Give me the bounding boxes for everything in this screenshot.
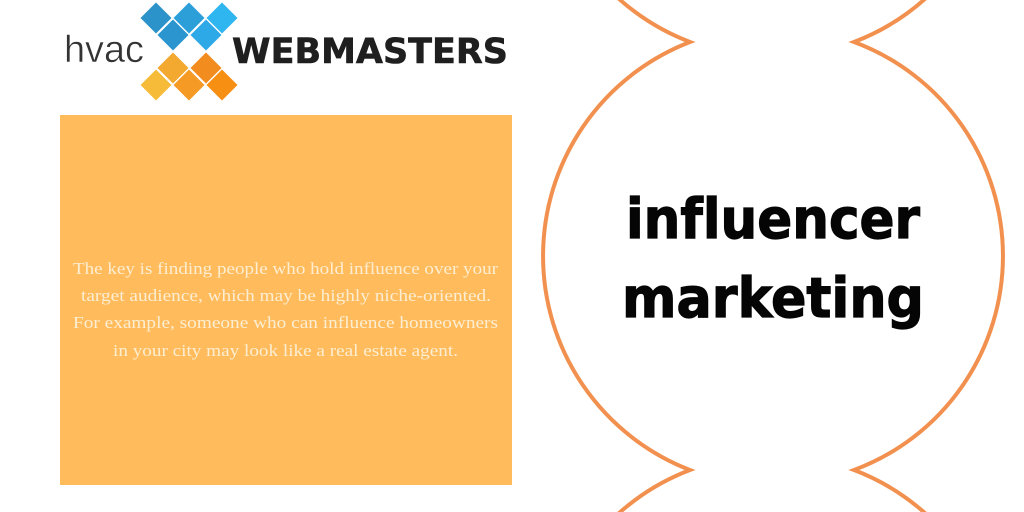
text block: description: target audience, which may be highly niche-oriented. [81, 286, 491, 305]
title: influencer marketing [622, 187, 924, 330]
logo mark: orange diamonds [140, 52, 238, 100]
title: influencer marketing: marketing [622, 266, 924, 330]
logo mark: blue diamonds [140, 2, 238, 50]
logo text: hvac: hvac [64, 29, 144, 71]
logo text: WEBMASTERS: WEBMASTERS [232, 32, 508, 72]
text block: description [73, 259, 498, 360]
title: influencer marketing: influencer [626, 187, 920, 251]
text block: description: The key is finding people who hold influence over your [73, 259, 498, 278]
text block: description: For example, someone who can influence homeowners [73, 313, 498, 332]
logo: hvac webmasters [64, 2, 508, 100]
panel: orange text box [60, 115, 512, 485]
text block: description: in your city may look like a real estate agent. [113, 341, 458, 360]
scalloped circle outline [543, 0, 1003, 512]
